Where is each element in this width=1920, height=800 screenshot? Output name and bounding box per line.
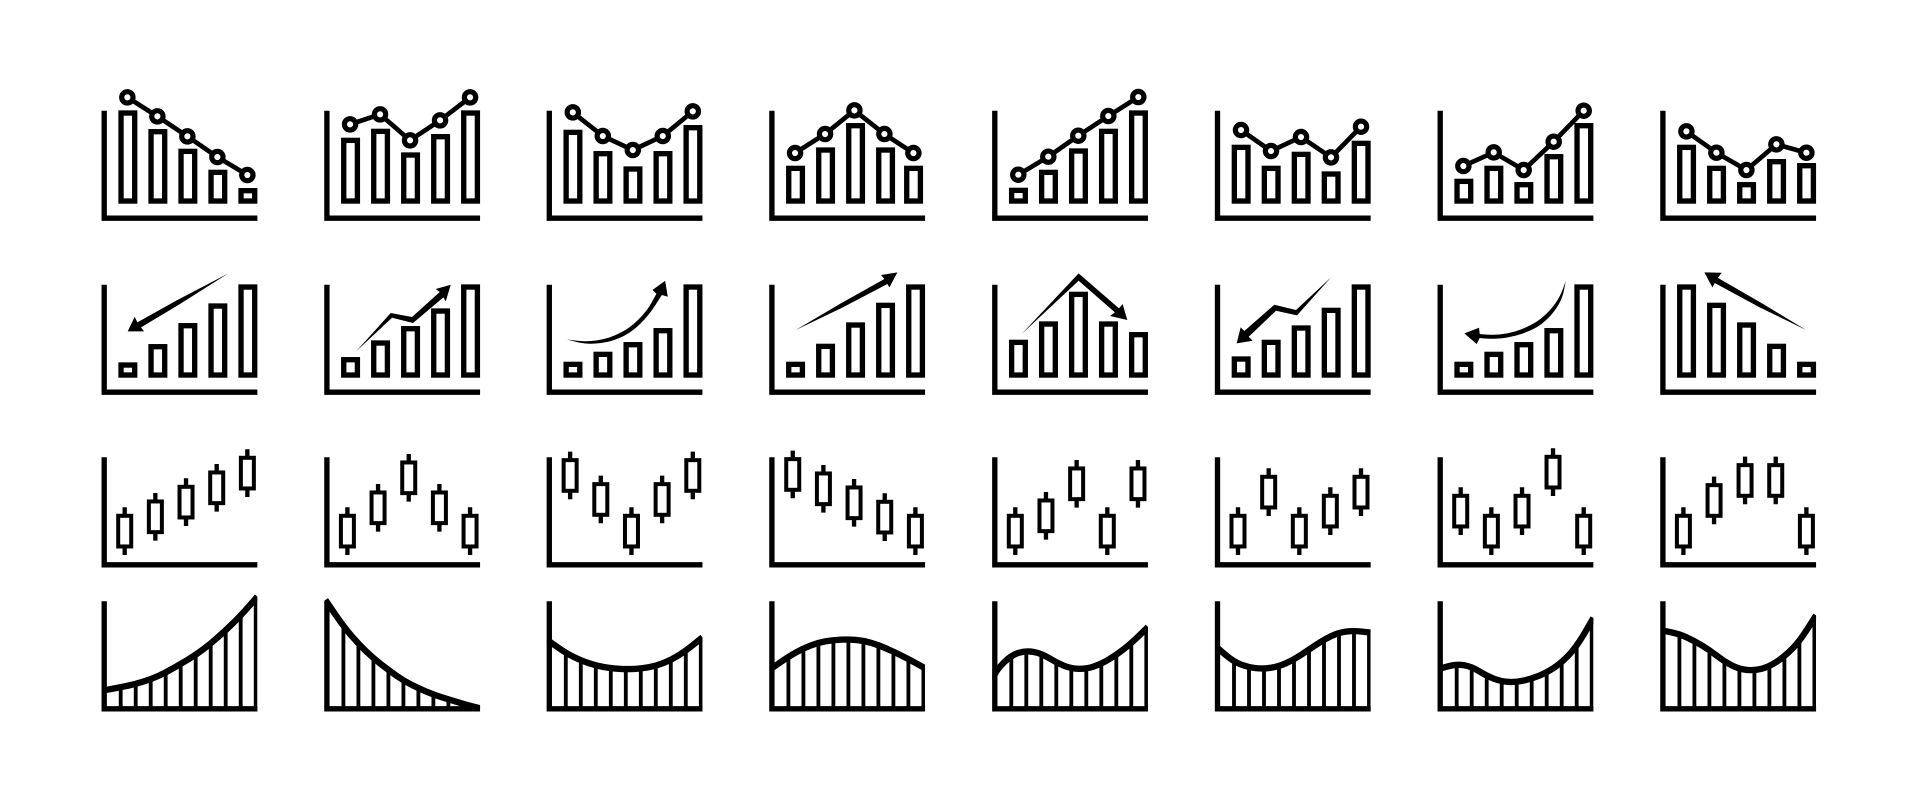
icon: area curve valley bbox=[547, 601, 702, 711]
row 2: bar charts with trend arrows bbox=[104, 272, 1816, 392]
icon: area curve rising bbox=[102, 597, 257, 711]
icon: bar and line chart, dip then rise bbox=[327, 92, 480, 218]
icon: rising bars with straight arrow pointing up-right bbox=[772, 272, 925, 392]
icon: candlesticks valley bbox=[549, 452, 702, 565]
icon: rising bars with curved arrow pointing left bbox=[1440, 281, 1593, 392]
icon: bar and line chart, fall then recover bbox=[1663, 111, 1816, 218]
icon: area curve low wave with sharp rise bbox=[1439, 601, 1593, 711]
icon: falling bars with straight arrow pointing up-left bbox=[1663, 272, 1816, 392]
row 4: hatched area curves bbox=[102, 597, 1816, 711]
icon: rising bars with kinked arrow pointing up-right bbox=[327, 285, 480, 392]
icon: bar and line chart, valley bbox=[549, 106, 702, 218]
row 3: candlestick charts bbox=[104, 448, 1816, 565]
icon: area curve wave rising bbox=[992, 601, 1148, 711]
icon: bar and line chart, late surge bbox=[1440, 105, 1593, 218]
icon: candlesticks up, down, climbing bbox=[1218, 457, 1371, 565]
row 1: bar charts with line overlay bbox=[104, 91, 1816, 218]
icon: rising bars with curved arrow pointing up bbox=[549, 281, 702, 392]
icon: rising bars with straight arrow pointing down-left bbox=[104, 273, 257, 392]
icon: candlesticks falling bbox=[772, 451, 925, 565]
icon: candlesticks rising bbox=[104, 449, 257, 565]
icon: area curve dip then plateau bbox=[1216, 601, 1371, 711]
icon: bar and line chart, rising bbox=[995, 91, 1148, 218]
icon: candlesticks plateau then drop bbox=[1663, 457, 1816, 565]
icon: candlesticks rise, dip, rise bbox=[995, 457, 1148, 565]
icon: candlesticks peak bbox=[327, 454, 480, 565]
icon: area curve falling bbox=[325, 600, 480, 711]
icon: bar and line chart, zigzag bbox=[1218, 111, 1371, 218]
icon: bar and line chart, peak bbox=[772, 105, 925, 218]
icon: peak bars with rise-and-fall arrow bbox=[995, 273, 1148, 392]
icon: area curve falling then sharp rise bbox=[1661, 601, 1816, 711]
icon: candlesticks mixed with high fourth bbox=[1440, 448, 1593, 565]
icon: rising bars with kinked arrow pointing down-left bbox=[1218, 277, 1371, 392]
icon: bar and line chart, falling bbox=[104, 92, 257, 218]
icon: area curve hill bbox=[769, 601, 925, 711]
